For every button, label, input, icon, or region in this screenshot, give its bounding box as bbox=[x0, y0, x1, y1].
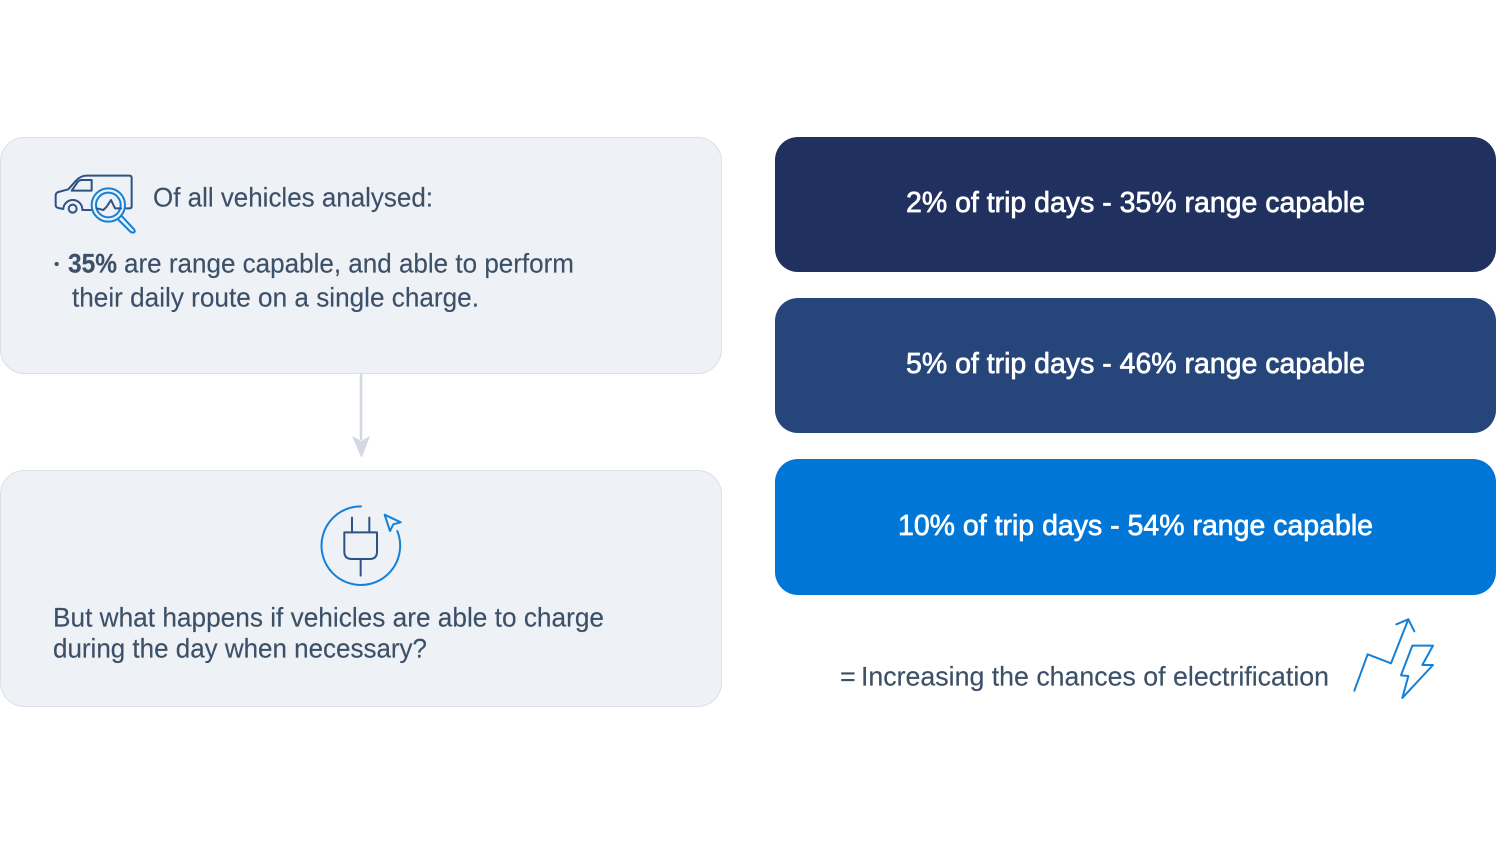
text: range capable statement bbox=[54, 248, 574, 312]
bar: 5% of trip days: 5% of trip days - 46% range capable bbox=[906, 348, 1365, 380]
panel: vehicles analysed bbox=[0, 138, 722, 374]
text: range capable statement: • bbox=[54, 256, 59, 273]
bar: 2% of trip days: 2% of trip days - 35% range capable bbox=[906, 187, 1365, 219]
bar: 2% of trip days bbox=[775, 137, 1496, 272]
text: charging question bbox=[53, 602, 604, 664]
text: conclusion: = bbox=[840, 662, 856, 692]
text: range capable statement: their daily route on a single charge. bbox=[72, 282, 479, 312]
bar: 10% of trip days bbox=[775, 459, 1496, 595]
text: range capable statement: are range capable, and able to perform bbox=[124, 248, 574, 278]
heading: of all vehicles: Of all vehicles analysed: bbox=[153, 182, 433, 212]
text: conclusion: Increasing the chances of electrification bbox=[861, 662, 1329, 692]
bar: 5% of trip days bbox=[775, 298, 1496, 433]
icon: rising arrow and lightning bolt bbox=[1354, 619, 1433, 698]
bar: 10% of trip days: 10% of trip days - 54% range capable bbox=[898, 510, 1373, 542]
icon: plug with cycle arrow bbox=[322, 506, 401, 585]
arrow: down bbox=[352, 374, 370, 457]
panel: charging question bbox=[0, 470, 722, 706]
text: range capable statement: 35% bbox=[68, 248, 117, 278]
text: charging question: during the day when necessary? bbox=[53, 634, 427, 664]
text: charging question: But what happens if vehicles are able to charge bbox=[53, 602, 604, 632]
icon: van with magnifier bbox=[56, 176, 135, 233]
